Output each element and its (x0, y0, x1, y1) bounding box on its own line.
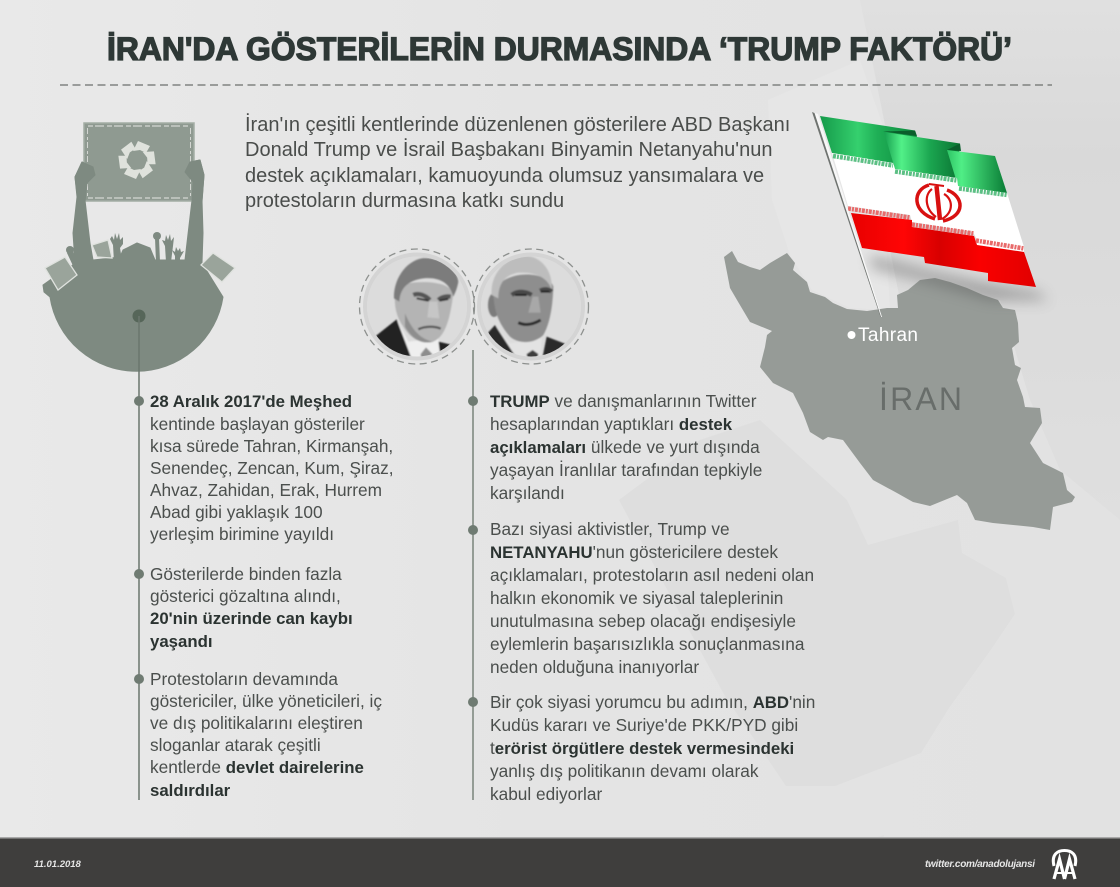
flag (820, 116, 1048, 300)
left column: point 2 (150, 564, 353, 651)
right column: point 3: yanlış dış politikanın devamı olarak (490, 761, 758, 781)
left column: point 1: Senendeç, Zencan, Kum, Şiraz, (150, 458, 394, 478)
map label: Tahran: Tahran (858, 325, 918, 346)
portrait: Netanyahu (473, 249, 588, 370)
sign (75, 123, 204, 202)
portrait: Trump (360, 249, 474, 370)
right column: point 1: yaşayan İranlılar tarafından tepkiyle (490, 460, 762, 480)
right column: point 1: TRUMP ve danışmanlarının Twitter (490, 391, 756, 411)
right column: point 2: Bazı siyasi aktivistler, Trump ve (490, 519, 730, 539)
left column: point 1: Abad gibi yaklaşık 100 (150, 502, 323, 522)
right column: point 3: Kudüs kararı ve Suriye'de PKK/PYD gibi (490, 715, 798, 735)
protest silhouette (43, 123, 235, 800)
right column: point 1: açıklamaları ülkede ve yurt dışında (490, 437, 760, 457)
icon: AA logo (1053, 850, 1076, 879)
right column: point 2: açıklamaları, protestoların asıl nedeni olan (490, 565, 814, 585)
right column: point 2: NETANYAHU'nun göstericilere destek (490, 542, 778, 562)
footer: 11.01.2018 (34, 859, 82, 870)
left column: point 2: 20'nin üzerinde can kaybı (150, 609, 353, 628)
left column: point 2: Gösterilerde binden fazla (150, 564, 342, 584)
left column: point 3: kentlerde devlet dairelerine (150, 757, 364, 777)
right column: point 2 (490, 519, 814, 677)
left column: point 1: yerleşim birimine yayıldı (150, 524, 334, 544)
intro text: destek açıklamaları, kamuoyunda olumsuz yansımalara ve (245, 165, 764, 187)
intro text: protestoların durmasına katkı sundu (245, 190, 564, 212)
right column: point 3 (490, 692, 815, 804)
left column: point 1: 28 Aralık 2017'de Meşhed (150, 392, 352, 411)
right column: point 2: unutulmasına sebep olacağı endişesiyle (490, 611, 796, 631)
title: İRAN'DA GÖSTERİLERİN DURMASINDA ‘TRUMP FAKTÖRÜ’ (107, 31, 1012, 67)
right column: point 2: neden olduğuna inanıyorlar (490, 657, 699, 677)
bullets (134, 396, 478, 707)
portraits (360, 249, 588, 800)
right column: point 3: terörist örgütlere destek vermesindeki (490, 738, 794, 758)
left column: point 3: göstericiler, ülke yöneticileri, iç (150, 691, 382, 711)
left column: point 2: yaşandı (150, 632, 212, 651)
left column: point 3: saldırdılar (150, 781, 230, 800)
right column: point 2: eylemlerin başarısızlıkla sonuçlanmasına (490, 634, 804, 654)
silhouette dot (132, 310, 146, 322)
right column: point 1: karşılandı (490, 483, 565, 503)
left column: point 1: Ahvaz, Zahidan, Erak, Hurrem (150, 480, 382, 500)
right column: point 3: Bir çok siyasi yorumcu bu adımın, ABD'nin (490, 692, 815, 712)
intro text: Donald Trump ve İsrail Başbakanı Binyamin Netanyahu'nun (245, 139, 772, 161)
left column: point 1 (150, 392, 394, 544)
right column: point 1: hesaplarından yaptıkları destek (490, 414, 732, 434)
footer: twitter.com/anadolujansi (925, 859, 1035, 870)
left column: point 3: ve dış politikalarını eleştiren (150, 713, 363, 733)
footer (0, 837, 1120, 887)
left column: point 1: kısa sürede Tahran, Kirmanşah, (150, 436, 393, 456)
icon: emblem (114, 139, 160, 181)
raised hands (66, 232, 184, 268)
left column: point 2: gösterici gözaltına alındı, (150, 586, 341, 606)
map label: Iran: İRAN (879, 381, 962, 417)
intro text (245, 113, 790, 212)
intro text: İran'ın çeşitli kentlerinde düzenlenen gösterilere ABD Başkanı (245, 114, 790, 136)
left column: point 3: sloganlar atarak çeşitli (150, 735, 321, 755)
small placards (45, 240, 235, 290)
left column: point 3 (150, 669, 382, 800)
silhouette stem line (138, 316, 140, 800)
left column: point 3: Protestoların devamında (150, 669, 338, 689)
map: Iran (724, 251, 1075, 530)
flag pole (812, 112, 882, 317)
left column: point 1: kentinde başlayan gösteriler (150, 414, 365, 434)
right column: point 2: halkın ekonomik ve siyasal taleplerinin (490, 588, 783, 608)
flag emblem (917, 184, 960, 221)
right column: point 1 (490, 391, 762, 503)
right column: point 3: kabul ediyorlar (490, 784, 602, 804)
